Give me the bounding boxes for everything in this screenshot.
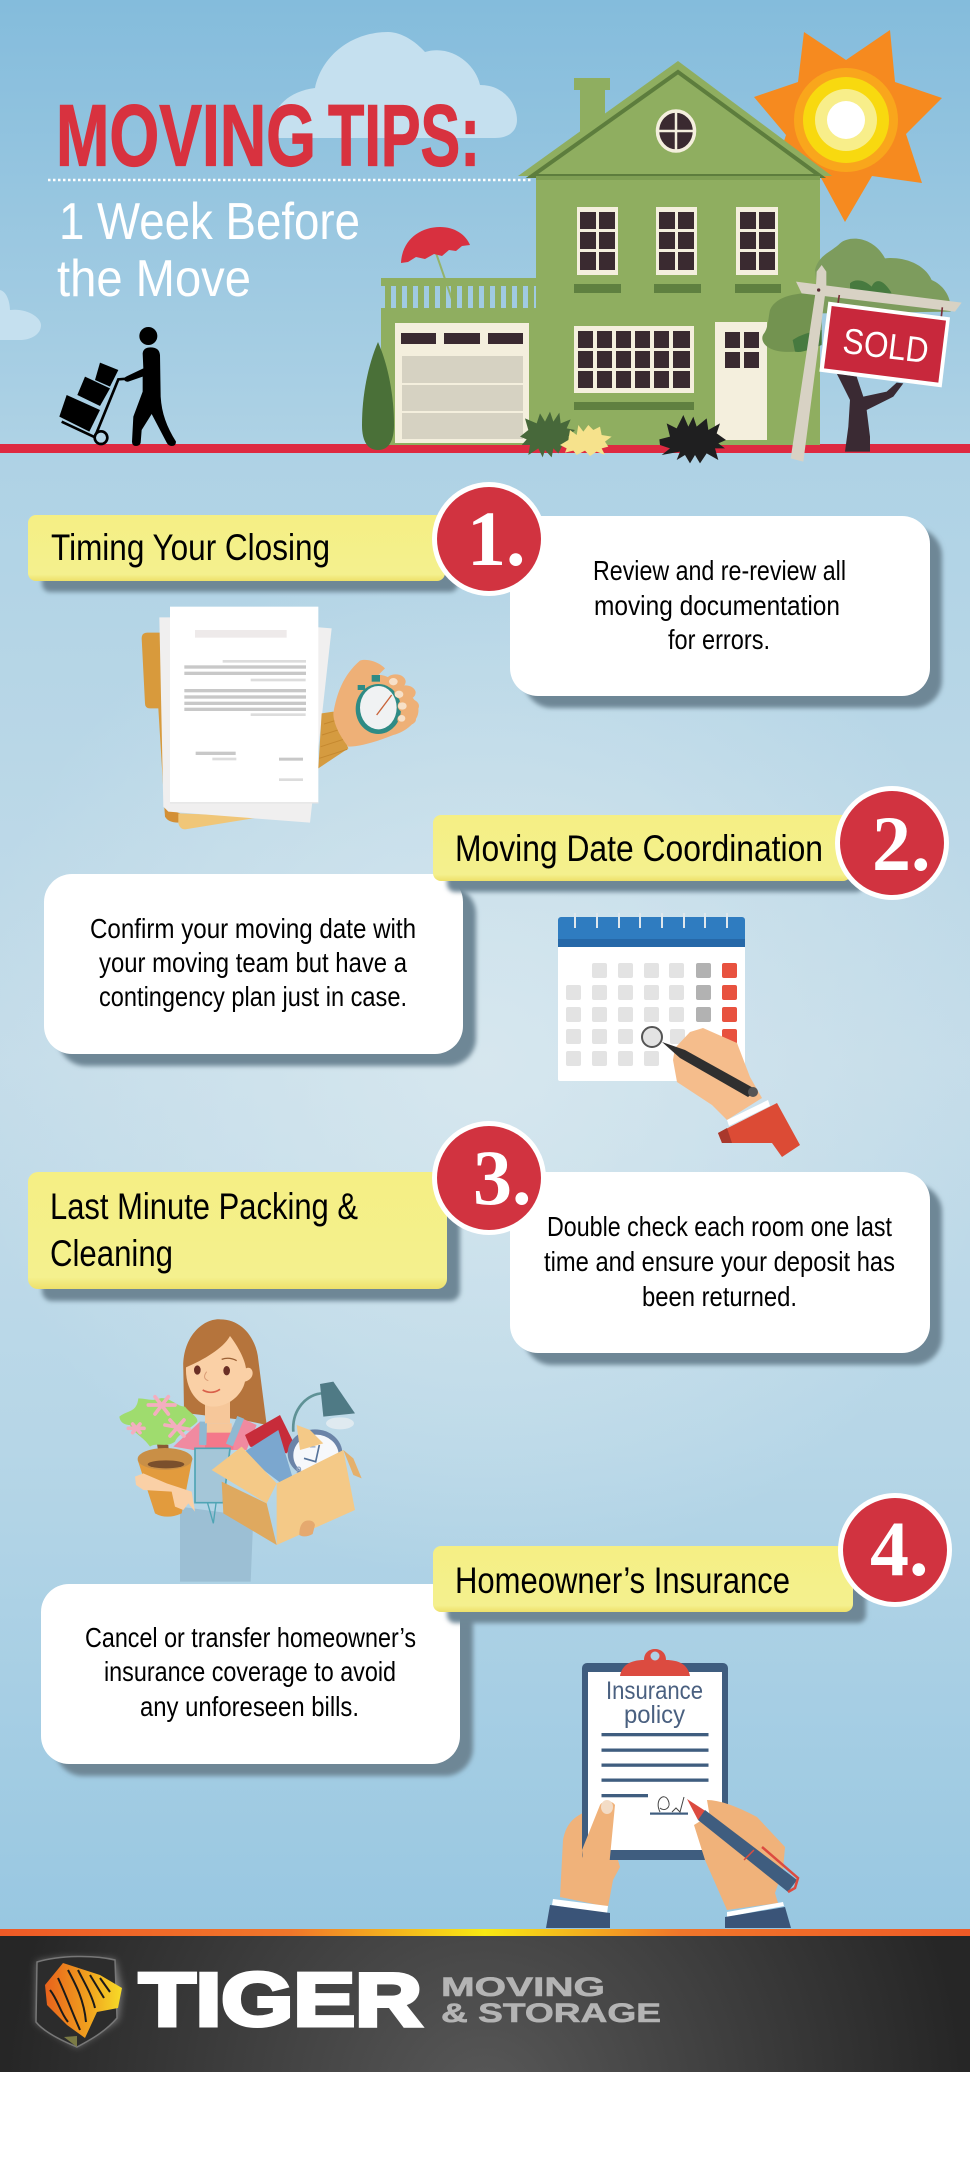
section 3 body text: time and ensure your deposit has — [544, 1246, 895, 1277]
large window — [574, 326, 694, 393]
sign board — [819, 302, 950, 387]
policy label: policy — [624, 1701, 685, 1729]
shirt cuff — [718, 1100, 800, 1157]
section 2 heading bar — [433, 815, 864, 892]
title: TIPS: — [328, 88, 480, 184]
left cuff — [546, 1899, 610, 1928]
section 4 body text: Cancel or transfer homeowner’s — [85, 1622, 416, 1653]
section 4 body text — [85, 1622, 416, 1722]
paper — [588, 1672, 722, 1850]
upper windows — [577, 207, 778, 275]
section 3 body text: been returned. — [642, 1281, 797, 1312]
subtitle: 1 Week Before — [59, 193, 360, 251]
section 2 body text: contingency plan just in case. — [99, 981, 407, 1012]
section 2 body text: your moving team but have a — [99, 947, 407, 978]
house illustration — [362, 61, 962, 463]
clock: 12 — [303, 1438, 316, 1450]
legs — [180, 1507, 253, 1582]
brand tagline — [441, 1972, 661, 2028]
policy label: Insurance — [606, 1677, 703, 1705]
cypress — [362, 342, 394, 450]
section 4 number badge: 4. — [870, 1505, 928, 1592]
section 3 number badge: 3. — [473, 1134, 532, 1221]
chimney — [574, 78, 610, 140]
main body — [536, 176, 820, 445]
section 1 body text: for errors. — [668, 624, 770, 655]
lamp — [293, 1382, 355, 1432]
folder — [142, 633, 263, 829]
pen — [687, 1799, 798, 1892]
umbrella — [401, 227, 470, 308]
right hand — [694, 1800, 785, 1910]
section 4 number badge — [838, 1493, 952, 1607]
shrubs — [520, 412, 726, 463]
books — [242, 1415, 294, 1485]
pen — [662, 1042, 758, 1097]
illustration: woman holding moving box — [119, 1319, 362, 1582]
hand — [673, 1028, 762, 1120]
section 2 body text: Confirm your moving date with — [90, 913, 416, 944]
signature — [658, 1797, 684, 1812]
left hand back — [560, 1812, 620, 1907]
clock: 9 — [296, 1465, 302, 1476]
balcony — [381, 278, 536, 445]
logo shield — [36, 1956, 122, 2047]
red ground line — [0, 444, 970, 453]
section 2 heading bar: Moving Date Coordination — [455, 828, 823, 869]
section 3 number badge — [432, 1121, 546, 1235]
left thumb — [582, 1801, 615, 1880]
clock — [288, 1429, 342, 1477]
policy label — [606, 1677, 703, 1729]
garage door — [395, 323, 529, 443]
main document — [170, 607, 318, 803]
box — [212, 1425, 362, 1545]
paper stack — [159, 617, 332, 823]
section 2 white card — [44, 874, 476, 1066]
small cloud left — [0, 290, 41, 340]
roof — [518, 61, 832, 180]
foliage — [762, 239, 951, 352]
section 2 number badge: 2. — [872, 800, 930, 887]
section 1 heading bar — [28, 515, 458, 592]
round window — [658, 111, 694, 151]
brand tagline: & STORAGE — [441, 1998, 661, 2028]
overalls — [195, 1417, 241, 1523]
section 1 white card — [510, 516, 942, 708]
calendar — [558, 913, 745, 1081]
section 4 heading bar — [433, 1546, 866, 1623]
right cuff — [725, 1902, 791, 1928]
sign board: SOLD — [841, 320, 931, 371]
section 2 body text — [90, 913, 416, 1012]
front door — [715, 322, 767, 440]
section 1 heading bar: Timing Your Closing — [51, 527, 330, 568]
arm — [135, 1473, 195, 1512]
brand name: TIGER — [139, 1958, 422, 2042]
hand with stopwatch — [318, 660, 419, 768]
section 4 body text: any unforeseen bills. — [140, 1691, 359, 1722]
brand tagline: MOVING — [441, 1972, 605, 2002]
tree and sold sign — [762, 239, 962, 462]
plant — [119, 1397, 197, 1517]
section 1 number badge — [432, 482, 546, 596]
title: MOVING — [56, 88, 316, 184]
clip — [620, 1649, 690, 1676]
section 1 body text: Review and re-review all — [593, 555, 846, 586]
cloud behind title — [270, 32, 517, 138]
face — [186, 1336, 253, 1423]
section 3 white card — [510, 1172, 942, 1365]
section 1 number badge: 1. — [467, 495, 526, 582]
window boxes — [574, 284, 781, 410]
section 3 heading bar — [28, 1172, 460, 1301]
footer band — [0, 1936, 970, 2072]
illustration: documents and stopwatch — [142, 607, 419, 829]
icon: person pushing hand truck — [59, 327, 176, 446]
illustration: calendar and hand with pen — [558, 913, 800, 1157]
subtitle: the Move — [57, 250, 251, 308]
hooks — [837, 295, 942, 320]
illustration: insurance policy clipboard — [546, 1649, 798, 1928]
icon: sun — [754, 30, 942, 222]
section 3 body text — [544, 1211, 895, 1312]
section 3 body text: Double check each room one last — [547, 1211, 892, 1242]
dotted divider — [48, 179, 533, 181]
shirt — [173, 1417, 257, 1450]
subtitle — [57, 193, 360, 308]
post — [791, 265, 962, 462]
section 4 heading bar: Homeowner’s Insurance — [455, 1560, 790, 1601]
section 4 body text: insurance coverage to avoid — [104, 1656, 396, 1687]
trunk — [837, 373, 903, 452]
section 3 heading bar: Cleaning — [50, 1233, 173, 1274]
section 1 body text: moving documentation — [594, 590, 840, 621]
section 3 heading bar: Last Minute Packing & — [50, 1186, 358, 1227]
clipboard — [582, 1663, 728, 1860]
section 4 white card — [41, 1584, 473, 1776]
section 2 number badge — [835, 786, 949, 900]
footer color stripe — [0, 1929, 970, 1936]
hair — [183, 1319, 267, 1425]
section 1 body text — [593, 555, 846, 655]
